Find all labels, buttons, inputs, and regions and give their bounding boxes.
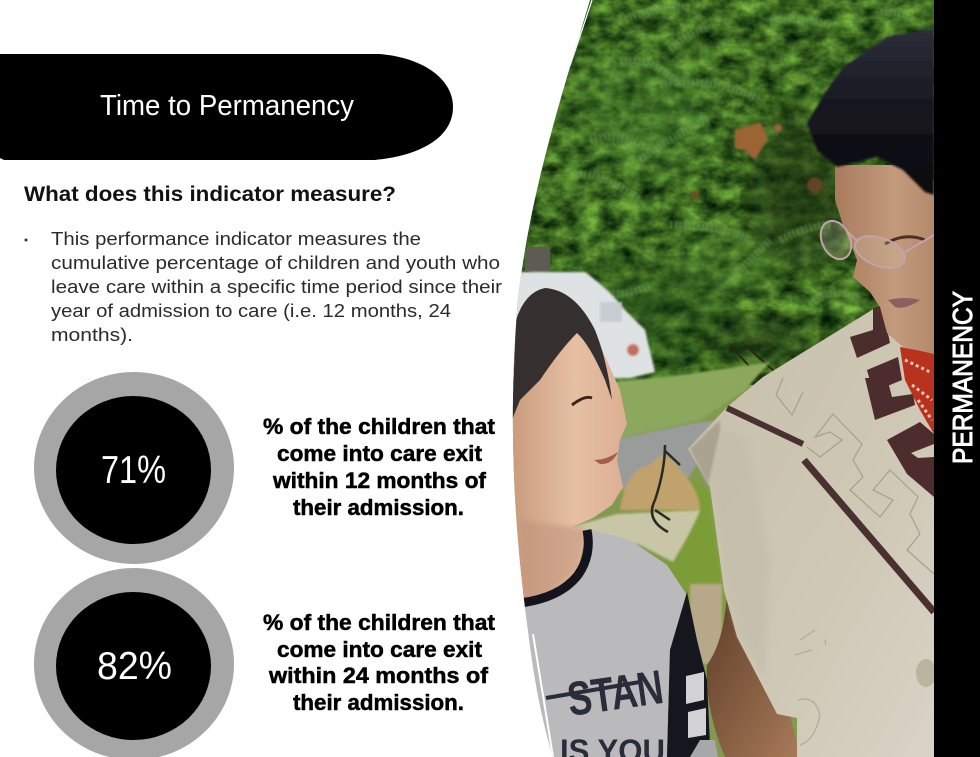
heading: What does this indicator measure? [24, 182, 396, 206]
white edge line bottom [533, 634, 553, 757]
stat label 12 months: come into care exit [277, 441, 483, 466]
description bullet text: year of admission to care (i.e. 12 months, 24 [51, 301, 451, 321]
stat circle 71%: 71% [101, 449, 166, 492]
title banner [0, 54, 453, 160]
t-shirt lettering [546, 670, 664, 757]
side bar label: PERMANENCY [947, 291, 978, 464]
grass [610, 362, 770, 440]
wooden post [690, 584, 722, 664]
woman's eye [885, 237, 925, 244]
stat label 24 months [263, 610, 496, 715]
title: Time to Permanency [100, 90, 354, 122]
dark brown appliqué motifs [850, 305, 934, 497]
sleeve stripes [686, 672, 706, 738]
lawn base behind the figures [512, 377, 797, 757]
child's shaded neck [522, 523, 586, 598]
description bullet text: leave care within a specific time period since their [51, 277, 502, 297]
watch [690, 740, 718, 757]
child's face and neck [510, 330, 627, 605]
bright grass lower [661, 480, 726, 630]
woman's hair [807, 28, 934, 195]
stat label 12 months: within 12 months of [272, 468, 487, 493]
plant pot [560, 510, 700, 562]
dark plant stems [652, 445, 680, 532]
beaded necklace [900, 347, 934, 434]
stat label 24 months: within 24 months of [268, 663, 489, 688]
stat circle 71% [34, 372, 234, 564]
stat label 24 months: % of the children that [263, 610, 496, 635]
woman's arm [707, 590, 800, 757]
white parked car [515, 272, 655, 378]
woman's face [835, 165, 934, 354]
photo: grandmother and child in front of cedar tree [510, 0, 940, 757]
stat label 24 months: come into care exit [277, 637, 483, 662]
road [617, 420, 715, 492]
description bullet text [24, 229, 502, 345]
child's smile [594, 452, 618, 464]
stat label 12 months: % of the children that [263, 414, 496, 439]
child's eye [572, 397, 592, 405]
description bullet text: months). [51, 325, 133, 345]
dark diagonal trim lower [804, 460, 934, 612]
stitching pattern [776, 378, 934, 574]
side bar [934, 0, 980, 757]
grey wall [525, 247, 550, 271]
child's hair [512, 288, 612, 420]
dried plant [620, 456, 700, 510]
stat label 24 months: their admission. [293, 690, 464, 715]
stat circle 82% [34, 568, 234, 757]
white edge line top [570, 0, 592, 66]
tree branches above grass [730, 345, 775, 378]
description bullet text: This performance indicator measures the [51, 229, 421, 249]
t-shirt collar [520, 530, 588, 603]
woman's glasses [820, 220, 934, 269]
dark diagonal trim upper [727, 408, 803, 444]
child's black sleeve [667, 592, 710, 757]
woman's lips [888, 298, 920, 308]
woman's poncho [688, 305, 936, 757]
smudges on poncho [795, 630, 826, 745]
foliage background [510, 0, 940, 385]
stat circle 82%: 82% [97, 645, 172, 688]
stat label 12 months [263, 414, 496, 520]
stat label 12 months: their admission. [293, 495, 464, 520]
orange dead leaves [691, 122, 823, 199]
t-shirt lettering: STAN [564, 661, 667, 727]
description bullet text: cumulative percentage of children and youth who [51, 253, 500, 273]
child's t-shirt [515, 530, 687, 757]
